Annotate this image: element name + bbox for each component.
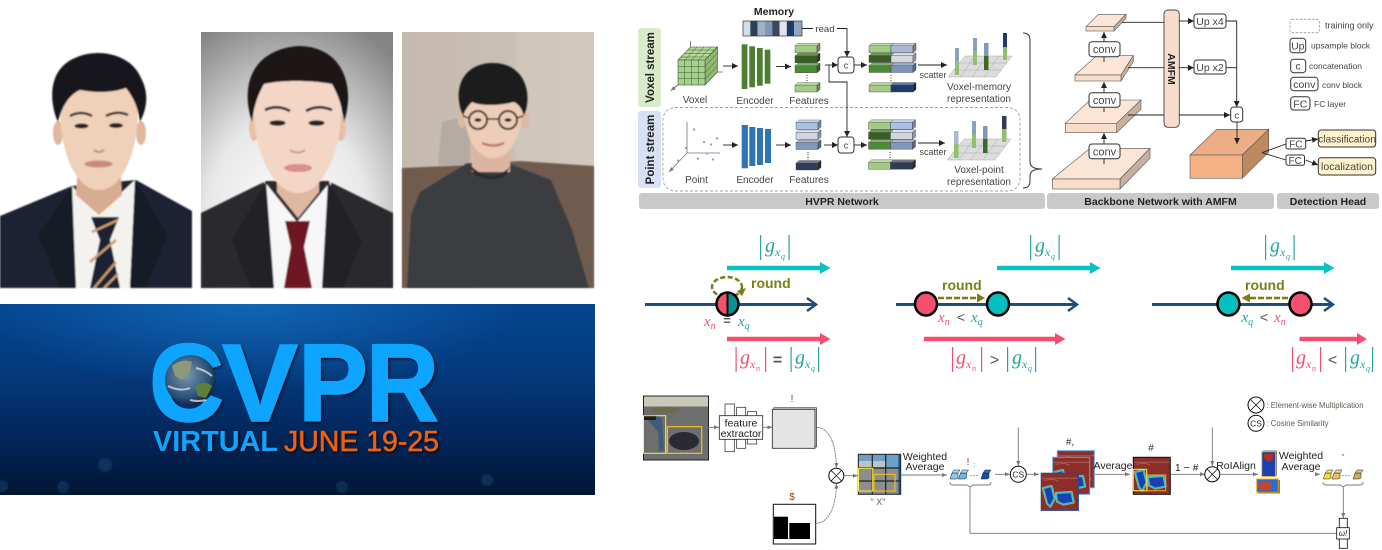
equation: magnitude greater: >: [990, 352, 999, 369]
classification output: [1318, 130, 1376, 147]
voxel features: [795, 43, 820, 92]
legend: conv block: [1322, 80, 1363, 90]
yellow prototype vectors: ": [1342, 453, 1345, 462]
backbone layers: [1052, 14, 1150, 189]
blue prototype vectors: ···: [970, 470, 978, 480]
arrow: to cosine similarity: [995, 473, 1010, 475]
cosine similarity node: CS: [1012, 469, 1025, 479]
equation: xn = xq: n: [711, 321, 716, 332]
legend: operators: [1248, 397, 1364, 431]
memory bank: Memory: [754, 6, 794, 18]
arrow: extractor to features: [763, 426, 772, 428]
weighted average label one: [903, 451, 947, 473]
panel: training only point branch outline: [663, 108, 1020, 191]
gradient magnitude label q: q: [781, 252, 785, 261]
weighted average label one: Weighted: [903, 451, 947, 463]
arrow: teal gradient: [727, 266, 822, 270]
arrow: to blue vectors: [901, 474, 947, 476]
conv blocks: conv: [1093, 95, 1117, 107]
conv blocks: conv: [1093, 44, 1117, 56]
axis: [1152, 298, 1333, 311]
localization output: localization: [1321, 161, 1373, 173]
equation: xq < xn: n: [1281, 317, 1286, 328]
equation: magnitudes equal: g: [740, 347, 750, 369]
weighted average label two: Average: [1282, 461, 1321, 473]
FC block upper: FC: [1289, 140, 1302, 150]
banner: CVPR virtual: [0, 304, 595, 495]
equation: magnitudes equal: q: [811, 364, 815, 373]
equation: magnitude greater: q: [1028, 364, 1032, 373]
panel: point stream label: Point stream: [645, 115, 657, 184]
feature extractor: extractor: [721, 428, 762, 440]
label: round: round: [942, 277, 982, 293]
voxel-point representation: [947, 116, 1011, 160]
section bar: backbone network: Backbone Network with AMFM: [1084, 196, 1237, 208]
equation: magnitudes equal: x: [749, 357, 756, 371]
equation: xq < xn: q: [1248, 317, 1253, 328]
node: xq: [1218, 292, 1240, 316]
arrow: round dashed: [1242, 294, 1288, 302]
equation: magnitudes equal: n: [756, 364, 760, 373]
equation: xn = xq: =: [723, 313, 731, 328]
label: RoIAlign: RoIAlign: [1216, 460, 1256, 472]
equation: magnitude greater: g: [956, 347, 966, 369]
legend: c: [1296, 62, 1300, 72]
equation: magnitude less: x: [1359, 357, 1366, 371]
upsample x2: Up x2: [1196, 62, 1224, 74]
equation: magnitudes equal: g: [795, 347, 805, 369]
equation: magnitude greater: [952, 347, 1036, 373]
arrow: round dashed: [938, 294, 985, 302]
concat block voxel: [838, 57, 854, 73]
banner title: CVPR: P: [298, 322, 368, 445]
equation: magnitude greater: g: [1012, 347, 1022, 369]
point features: [796, 120, 821, 170]
icon: point cloud: [669, 122, 720, 172]
icon: voxel cube: [671, 41, 723, 91]
equation: xn = xq: q: [745, 321, 750, 332]
equation: magnitude greater: x: [965, 357, 972, 371]
legend: upsample block: [1311, 40, 1371, 50]
legend: operators: : Element-wise Multiplication: [1266, 401, 1364, 410]
legend: operators: CS: [1250, 418, 1262, 428]
arrow: image to extractor: [708, 426, 719, 428]
icon: earth globe: [165, 355, 216, 405]
arrow: to average heatmap: [1095, 473, 1130, 475]
arrow: teal gradient: [1231, 266, 1326, 270]
arrow: to loss: [1323, 482, 1363, 518]
diagram: gradient rounding comparison: [645, 235, 1373, 373]
feature extractor: feature: [725, 418, 757, 430]
section bar: HVPR network: HVPR Network: [805, 196, 879, 208]
weighted average label two: Weighted: [1279, 450, 1323, 462]
diagram: feature extraction pipeline: [644, 394, 1364, 548]
FC block lower: FC: [1289, 156, 1302, 167]
node: xn: [1290, 292, 1312, 316]
gradient magnitude label q: g: [1035, 235, 1045, 257]
equation: magnitudes equal: =: [773, 352, 782, 369]
memory bank: [743, 6, 802, 36]
blue prototype vectors: !: [967, 457, 969, 468]
concat block point: c: [844, 140, 849, 150]
loss block: [1337, 518, 1349, 548]
panel: voxel stream label: [638, 28, 661, 107]
case two: greater: [896, 235, 1100, 373]
arrow: pink gradient: [1300, 337, 1359, 341]
second multiply node: [1205, 427, 1220, 482]
equation: xn < xq: <: [957, 309, 965, 325]
label: round: round: [1245, 277, 1285, 293]
arrow: to heatmaps: [1027, 473, 1039, 475]
photo: third author portrait: [402, 32, 594, 288]
arrow: to second multiply: [1171, 473, 1205, 475]
gradient magnitude label q: [760, 235, 790, 261]
label: voxel: Voxel: [683, 95, 707, 106]
gradient magnitude label q: [1030, 235, 1060, 261]
concat block backbone: c: [1234, 110, 1239, 122]
label: round: round: [751, 275, 791, 291]
axis: [645, 298, 816, 311]
FC block upper: [1286, 138, 1306, 150]
section bar: detection head: [1277, 193, 1379, 209]
label: voxel-point representation: [947, 165, 1011, 188]
equation: xq < xn: <: [1260, 309, 1268, 325]
heatmap stack: #,: [1066, 437, 1074, 448]
voxel-memory representation: [948, 33, 1012, 77]
equation: magnitude less: g: [1296, 347, 1306, 369]
equation: xn = xq: x: [704, 314, 711, 330]
legend: training only: [1325, 20, 1374, 30]
input image: [644, 396, 708, 460]
weighted average label two: [1279, 450, 1323, 473]
voxel encoder: [742, 44, 770, 89]
arrow: teal gradient: [997, 266, 1092, 270]
legend: FC: [1293, 98, 1308, 110]
node: xn: [915, 292, 937, 316]
equation: magnitude less: x: [1305, 357, 1312, 371]
equation: xn = xq: x: [738, 314, 745, 330]
equation: magnitudes equal: [736, 347, 819, 373]
equation: magnitude less: <: [1328, 352, 1337, 369]
label: features: Features: [789, 96, 829, 107]
averaged heatmap: [1133, 443, 1170, 494]
arrow: multiply to attended map: [844, 475, 858, 477]
conv blocks: conv: [1093, 146, 1117, 158]
equation: magnitude less: n: [1312, 364, 1316, 373]
concatenated features voxel point: [868, 120, 916, 169]
equation: magnitude less: g: [1350, 347, 1360, 369]
gradient magnitude label q: g: [1270, 235, 1280, 257]
classification output: classification: [1318, 134, 1376, 146]
equation: magnitude greater: x: [1021, 357, 1028, 371]
feature extractor: [719, 404, 763, 452]
banner title: CVPR: C: [149, 322, 224, 445]
equation: magnitude less: [1292, 347, 1373, 373]
arrows: voxel stream flow: [723, 65, 947, 137]
icon: multiply circle: [829, 468, 844, 483]
case three: less: [1152, 235, 1373, 373]
banner subtitle: dates: JUNE 19-25: [284, 426, 439, 458]
legend: Up: [1291, 40, 1305, 52]
equation: xn < xq: q: [978, 317, 983, 328]
label: scatter lower: scatter: [919, 147, 947, 157]
concat block voxel: c: [844, 60, 849, 70]
equation: xn < xq: x: [971, 310, 978, 326]
cosine similarity node: [1010, 427, 1026, 482]
section bar: backbone network: [1047, 193, 1274, 209]
FC block lower: [1286, 155, 1304, 167]
brace: [1023, 33, 1042, 188]
point encoder: [742, 125, 771, 168]
panel: voxel stream label: Voxel stream: [645, 32, 657, 103]
label: encoder point: Encoder: [736, 175, 774, 186]
legend: conv: [1293, 79, 1316, 91]
mask box: [773, 492, 816, 544]
legend: concatenation: [1309, 61, 1362, 71]
label: scatter upper: scatter: [919, 70, 947, 80]
label: one minus: 1 − #: [1175, 462, 1199, 474]
arrow: pink gradient: [924, 337, 1057, 341]
label: voxel-memory representation: Voxel-memory: [947, 82, 1011, 93]
arrows: AMFM connections: [1122, 21, 1237, 115]
label: features point: Features: [789, 175, 829, 186]
arrow: pink gradient: [727, 337, 822, 341]
banner title: CVPR: V: [222, 322, 298, 445]
mask box: $: [789, 492, 795, 503]
label: point: Point: [685, 175, 708, 186]
averaged heatmap: #: [1148, 443, 1154, 454]
equation: xn < xq: n: [945, 317, 950, 328]
equation: magnitudes equal: x: [804, 357, 811, 371]
blue prototype vectors: :: [973, 462, 975, 469]
photo: second author portrait: [201, 32, 393, 288]
attended grid image: [858, 454, 901, 507]
equation: magnitude greater: n: [972, 364, 976, 373]
case one: equal: [645, 235, 830, 373]
concatenated features voxel memory: [869, 43, 916, 92]
section bar: detection head: Detection Head: [1290, 196, 1366, 208]
detection feature block: [1190, 129, 1269, 178]
localization output: [1318, 158, 1376, 175]
diagram: HVPR network architecture: [638, 6, 1379, 209]
equation: xn = xq: [703, 313, 750, 332]
label: voxel-memory representation: [947, 82, 1011, 105]
AMFM block: AMFM: [1165, 53, 1177, 85]
banner title: CVPR: [149, 322, 439, 445]
arrow: concat to block: [1236, 122, 1238, 144]
label: voxel-point representation: representation: [947, 177, 1011, 188]
banner title: CVPR: R: [366, 322, 439, 445]
node: xq: [987, 292, 1009, 316]
axis: [896, 298, 1077, 311]
equation: xq < xn: x: [1242, 310, 1248, 326]
blue prototype vectors: [950, 457, 991, 480]
label: voxel-point representation: Voxel-point: [954, 165, 1004, 176]
node: coincident points: [716, 292, 739, 316]
gradient magnitude label q: g: [765, 235, 775, 257]
gradient magnitude label q: x: [1044, 245, 1051, 259]
equation: xq < xn: [1240, 309, 1286, 328]
gradient magnitude label q: [1265, 235, 1295, 261]
equation: xn < xq: x: [938, 310, 945, 326]
skip connection: [950, 482, 1337, 533]
yellow prototype vectors: ···: [1342, 470, 1350, 480]
aligned crops: [1257, 451, 1280, 493]
arrow: to crops: [1220, 473, 1258, 475]
heatmap stack: [1041, 437, 1094, 510]
equation: xn < xq: [937, 309, 983, 328]
banner subtitle: virtual: VIRTUAL: [153, 426, 278, 458]
section bar: HVPR network: [639, 193, 1045, 209]
gradient magnitude label q: q: [1051, 252, 1055, 261]
gradient magnitude label q: x: [1279, 245, 1286, 259]
label: encoder: Encoder: [736, 96, 774, 107]
photo: first author portrait: [0, 32, 192, 288]
legend: [1290, 19, 1374, 110]
gradient magnitude label q: x: [774, 245, 781, 259]
equation: magnitude less: q: [1366, 364, 1370, 373]
panel: point stream label: [638, 111, 661, 188]
legend: operators: : Cosine Similarity: [1266, 419, 1328, 428]
arrows: point stream flow: [723, 143, 945, 145]
legend: FC layer: [1314, 99, 1346, 109]
read arrow: read: [815, 24, 835, 35]
arrows: curves into multiply: [817, 427, 836, 523]
AMFM block: [1164, 10, 1179, 127]
feature map: [772, 394, 816, 448]
gradient magnitude label q: q: [1286, 252, 1290, 261]
arrow: to yellow vectors: [1316, 473, 1320, 475]
attended grid image: " X": [871, 497, 885, 507]
icon: round loop: [712, 277, 746, 297]
read arrow: [802, 24, 847, 57]
feature map: !: [791, 394, 793, 405]
arrows: backbone upward: [1103, 32, 1105, 164]
weighted average label one: Average: [906, 461, 945, 473]
concat block point: [838, 137, 854, 153]
label: average: Average: [1094, 460, 1133, 472]
conv blocks: [1089, 42, 1120, 159]
arrows: detection head: [1262, 139, 1318, 165]
label: voxel-memory representation: representation: [947, 94, 1011, 105]
concat block backbone: [1231, 107, 1243, 122]
loss block: ω!: [1339, 529, 1348, 538]
yellow prototype vectors: [1323, 453, 1363, 480]
equation: xq < xn: x: [1274, 310, 1281, 326]
upsample x4: Up x4: [1196, 16, 1224, 28]
